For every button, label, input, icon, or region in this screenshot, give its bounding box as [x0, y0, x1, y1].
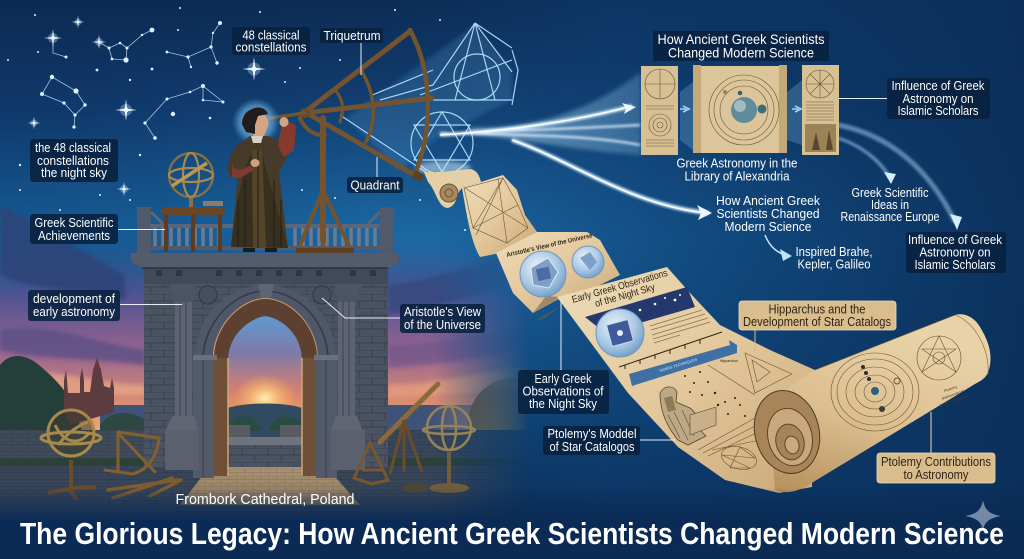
callout: 48 classical constellations: constellations — [236, 40, 307, 54]
callout: Ptolemy's Moddel of Star Catalogos: Ptolemy's Moddel — [548, 426, 637, 441]
distant hills — [100, 405, 472, 430]
descending curved arrows — [838, 125, 955, 222]
quadrant and sticks, left foreground — [105, 432, 181, 498]
flow arrowheads — [622, 103, 636, 114]
scholar sketch — [660, 387, 716, 445]
callout: Greek Scientific Achievements: Achievements — [38, 228, 110, 243]
callout: Quadrant: Quadrant — [350, 178, 400, 192]
caption: Greek Scientific Ideas in Renaissance Europe: Ideas in — [871, 197, 909, 212]
callout: the 48 classical constellations the night sky: the night sky — [41, 165, 107, 180]
feet — [243, 248, 255, 252]
callout: Influence of Greek Astronomy on Islamic Scholars, top: Influence of Greek — [892, 78, 985, 93]
crystal spheres — [520, 251, 566, 297]
parchment scroll ribbon — [424, 169, 991, 493]
caption: Greek Scientific Ideas in Renaissance Europe: Greek Scientific — [852, 185, 929, 200]
central scroll with cosmos — [693, 66, 787, 153]
head and hair — [250, 113, 268, 137]
night sky strip — [585, 287, 695, 333]
arch stone bands — [195, 285, 336, 462]
caption: Greek Scientific Ideas in Renaissance Europe — [840, 185, 940, 224]
top curl and sheet one — [424, 169, 481, 208]
callout: Early Greek Observations of the Night Sky: the Night Sky — [529, 396, 597, 411]
callout: Triquetrum: Triquetrum — [324, 28, 380, 43]
sleeves — [278, 118, 296, 157]
table — [160, 207, 226, 215]
roll small caption: Ptolemy — [944, 385, 958, 393]
location label: Frombork Cathedral, Poland: Frombork Cathedral, Poland — [176, 491, 354, 508]
callout: development of early astronomy: development of — [33, 291, 115, 306]
callout: 48 classical constellations — [232, 27, 310, 55]
cobbled path — [180, 437, 360, 505]
shadow — [533, 305, 562, 322]
roll small caption — [939, 385, 968, 408]
telescope and tools, right foreground — [354, 384, 438, 493]
callout: Influence of Greek Astronomy on Islamic Scholars, lower — [906, 232, 1006, 273]
line and polygon sketches — [698, 418, 760, 456]
caption: How Ancient Greek Scientists Changed Modern Science: How Ancient Greek — [716, 193, 820, 208]
callout: Ptolemy's Moddel of Star Catalogos — [543, 426, 675, 455]
Aristotle scroll caption: Aristotle's View of the Universe — [506, 232, 593, 259]
armillary sphere, left foreground — [41, 410, 101, 500]
blue arrow band — [629, 340, 737, 386]
armillary sphere, right foreground — [423, 406, 475, 493]
callout: Ptolemy Contributions to Astronomy: to Astronomy — [904, 467, 969, 482]
caption: Inspired Brahe, Kepler, Galileo: Inspired Brahe, — [796, 244, 872, 259]
caption: Greek Astronomy in the Library of Alexandria: Library of Alexandria — [684, 168, 790, 184]
collar — [251, 136, 263, 143]
callout: Ptolemy's Moddel of Star Catalogos: of Star Catalogos — [550, 439, 635, 454]
astronomer figure — [228, 98, 296, 252]
caption: How Ancient Greek Scientists Changed Modern Science: Scientists Changed — [716, 206, 820, 221]
callout: Influence of Greek Astronomy on Islamic Scholars, lower: Islamic Scholars — [914, 257, 996, 272]
cathedral silhouette — [64, 358, 114, 425]
text lines — [650, 310, 710, 343]
icon: sparkle watermark — [965, 500, 1001, 530]
roll small caption: Model of Cosmos — [939, 394, 968, 408]
caption: Inspired Brahe, Kepler, Galileo — [796, 244, 872, 272]
observations scroll heading: of the Night Sky — [594, 282, 656, 310]
bottom dark fade — [0, 488, 1024, 559]
arch wood inner band — [213, 298, 318, 455]
right manuscript — [802, 65, 839, 155]
rolled scroll body — [768, 314, 991, 492]
caption: Greek Astronomy in the Library of Alexandria: Greek Astronomy in the — [676, 156, 798, 170]
callout: Early Greek Observations of the Night Sky — [518, 300, 609, 414]
callout: the 48 classical constellations the night sky: constellations — [37, 153, 109, 168]
callout: development of early astronomy: early astronomy — [33, 304, 115, 319]
callout: Aristotle's View of the Universe: Aristotle's View — [404, 304, 482, 319]
callout: 48 classical constellations: 48 classical — [242, 28, 300, 42]
glowing geometric figures — [340, 23, 518, 175]
sunset clouds at the horizon — [0, 205, 530, 430]
callout: development of early astronomy — [28, 290, 182, 321]
caption: Greek Astronomy in the Library of Alexandria — [676, 156, 798, 184]
frieze and cornice — [144, 265, 388, 284]
left manuscript — [641, 66, 678, 155]
landscape: trees, cathedral, wall and ground — [0, 356, 531, 520]
roll end spiral — [746, 384, 828, 480]
heading callout: How Ancient Greek Scientists Changed Modern Science: How Ancient Greek Scientists — [658, 31, 824, 47]
sheet three: observations — [557, 267, 815, 493]
callout: Influence of Greek Astronomy on Islamic Scholars, top — [838, 78, 990, 119]
star polygon on roll — [917, 336, 961, 380]
callout: Ptolemy Contributions to Astronomy: Ptolemy Contributions — [881, 454, 991, 469]
left column — [175, 300, 192, 416]
callout: Hipparchus and the Development of Star Catalogs: Hipparchus and the — [768, 302, 866, 316]
callout: Hipparchus and the Development of Star Catalogs: Development of Star Catalogs — [743, 314, 891, 329]
caption: How Ancient Greek Scientists Changed Modern Science — [716, 193, 820, 234]
sighting tube — [270, 113, 305, 118]
stone wall — [0, 430, 145, 460]
sheet two: Aristotle's view — [496, 232, 620, 313]
manuscript panels: Library of Alexandria — [641, 65, 839, 155]
callout: Early Greek Observations of the Night Sky: Early Greek — [534, 371, 592, 386]
armillary sphere and table on balcony — [160, 153, 226, 252]
quadrant arms and arcs — [305, 32, 432, 176]
callout: Quadrant — [347, 157, 403, 193]
caption: How Ancient Greek Scientists Changed Modern Science: Modern Science — [724, 219, 812, 234]
caption: Greek Scientific Ideas in Renaissance Europe: Renaissance Europe — [840, 209, 940, 224]
triquetrum and quadrant instrument — [270, 30, 432, 253]
parchment scroll ribbon: HANDS TECHNIQUES — [659, 358, 698, 373]
callout: Triquetrum — [320, 28, 383, 75]
caption: Inspired Brahe, Kepler, Galileo: Kepler, Galileo — [798, 256, 870, 272]
observations scroll heading: Early Greek Observations — [571, 268, 669, 306]
callout: the 48 classical constellations the night sky: the 48 classical — [35, 140, 111, 155]
callout: Greek Scientific Achievements: Greek Scientific — [34, 215, 114, 230]
callout: the 48 classical constellations the night sky — [30, 139, 118, 182]
timeline — [619, 332, 722, 367]
right column — [338, 300, 355, 416]
constellations and stars — [7, 7, 466, 231]
triangle star catalog diagram — [745, 353, 792, 393]
heading callout: How Ancient Greek Scientists Changed Modern Science — [653, 31, 829, 61]
stand — [320, 118, 326, 240]
callout: Aristotle's View of the Universe: of the Universe — [404, 317, 481, 332]
trees — [0, 356, 82, 430]
roll small caption: Mathematical — [941, 389, 964, 401]
arch opening with sunset — [228, 316, 302, 440]
arch gate tower — [131, 207, 399, 478]
star map dots — [684, 371, 746, 417]
callout: Aristotle's View of the Universe — [322, 298, 485, 333]
orbit diagram on roll — [831, 353, 919, 431]
ground — [0, 466, 510, 516]
heading callout: How Ancient Greek Scientists Changed Modern Science: Changed Modern Science — [668, 44, 814, 60]
callout: Hipparchus and the Development of Star Catalogs — [739, 301, 896, 352]
halo — [232, 98, 280, 146]
parchment scroll ribbon: Hipparchus — [720, 359, 738, 363]
callout: Early Greek Observations of the Night Sky: Observations of — [522, 384, 604, 398]
sphere — [189, 196, 193, 207]
callout: Greek Scientific Achievements — [30, 214, 165, 244]
callout: Influence of Greek Astronomy on Islamic Scholars, top: Astronomy on — [902, 91, 974, 106]
callout: Ptolemy Contributions to Astronomy — [877, 412, 995, 483]
hands — [280, 117, 288, 127]
light beams to manuscript panels — [440, 72, 962, 261]
callout: Influence of Greek Astronomy on Islamic Scholars, lower: Influence of Greek — [908, 232, 1002, 247]
gate walls — [144, 262, 388, 467]
callout: Influence of Greek Astronomy on Islamic Scholars, top: Islamic Scholars — [898, 103, 979, 118]
callout: Influence of Greek Astronomy on Islamic Scholars, lower: Astronomy on — [920, 244, 990, 260]
balustrade — [137, 207, 151, 253]
keystone and medallions — [257, 280, 275, 298]
robe — [228, 136, 288, 248]
